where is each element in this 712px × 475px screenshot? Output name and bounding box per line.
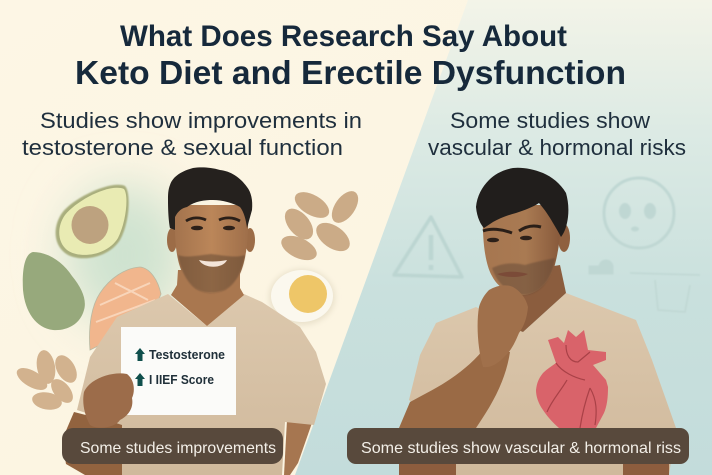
sign card (121, 327, 236, 415)
eyes of smiling man (191, 226, 235, 230)
background: green glow behind foods (65, 185, 185, 325)
heart illustration (536, 330, 608, 428)
right subheading (428, 108, 686, 160)
shirt of thoughtful man (409, 293, 676, 475)
lower arms of thoughtful man (399, 428, 669, 475)
icon: salmon slice (89, 267, 161, 350)
title: What Does Research Say About (120, 20, 567, 53)
illustration: thoughtful man (399, 168, 676, 475)
left subheading: Studies show improvements in (40, 108, 362, 133)
right arm of smiling man (284, 420, 313, 475)
ear of thoughtful man (558, 224, 570, 252)
mouth of thoughtful man (497, 272, 528, 277)
neck of smiling man (171, 270, 244, 326)
illustration: smiling man (62, 167, 326, 475)
stubble of smiling man (178, 254, 245, 293)
illustration: faded medical icons (589, 260, 700, 312)
icon: halved avocado (56, 185, 129, 258)
face of thoughtful man (483, 205, 561, 295)
title (75, 20, 626, 91)
eyebrows of thoughtful man (483, 226, 541, 233)
title: Keto Diet and Erectile Dysfunction (75, 54, 626, 91)
caption bar left: Some studes improvements (80, 440, 276, 457)
right subheading: Some studies show (450, 108, 651, 133)
ears of smiling man (167, 228, 255, 252)
icon: almonds right (278, 187, 364, 265)
eyes of thoughtful man (487, 236, 532, 242)
right subheading: vascular & hormonal risks (428, 135, 686, 160)
hair of smiling man (168, 167, 252, 230)
icon: almonds lower left (13, 349, 81, 412)
caption bar left (62, 428, 283, 464)
card label: IIEF score: I IIEF Score (149, 373, 214, 387)
card label: testosterone: Testosterone (149, 348, 225, 362)
hand on chin (478, 285, 528, 367)
background: teal diagonal panel (295, 0, 712, 475)
eyebrows of smiling man (186, 218, 240, 221)
forearm of thoughtful man (399, 350, 510, 428)
face of smiling man (175, 205, 248, 293)
left arm of smiling man (62, 412, 125, 475)
stubble of thoughtful man (492, 258, 555, 295)
left subheading: testosterone & sexual function (22, 135, 343, 160)
caption bar right: Some studies show vascular & hormonal riss (361, 440, 681, 457)
arrow: testosterone up (135, 348, 145, 361)
icon: whole avocado (23, 252, 85, 330)
caption bar right (347, 428, 689, 464)
hand holding card (83, 373, 134, 428)
illustration: faded sad face (604, 178, 674, 248)
hair of thoughtful man (476, 168, 568, 237)
illustration: faded warning triangle (394, 217, 462, 277)
smile of smiling man (199, 260, 227, 267)
left subheading (22, 108, 362, 160)
icon: boiled egg (269, 269, 335, 325)
shirt of smiling man (77, 294, 326, 475)
neck of thoughtful man (500, 265, 566, 332)
arrow: IIEF up (135, 373, 145, 386)
